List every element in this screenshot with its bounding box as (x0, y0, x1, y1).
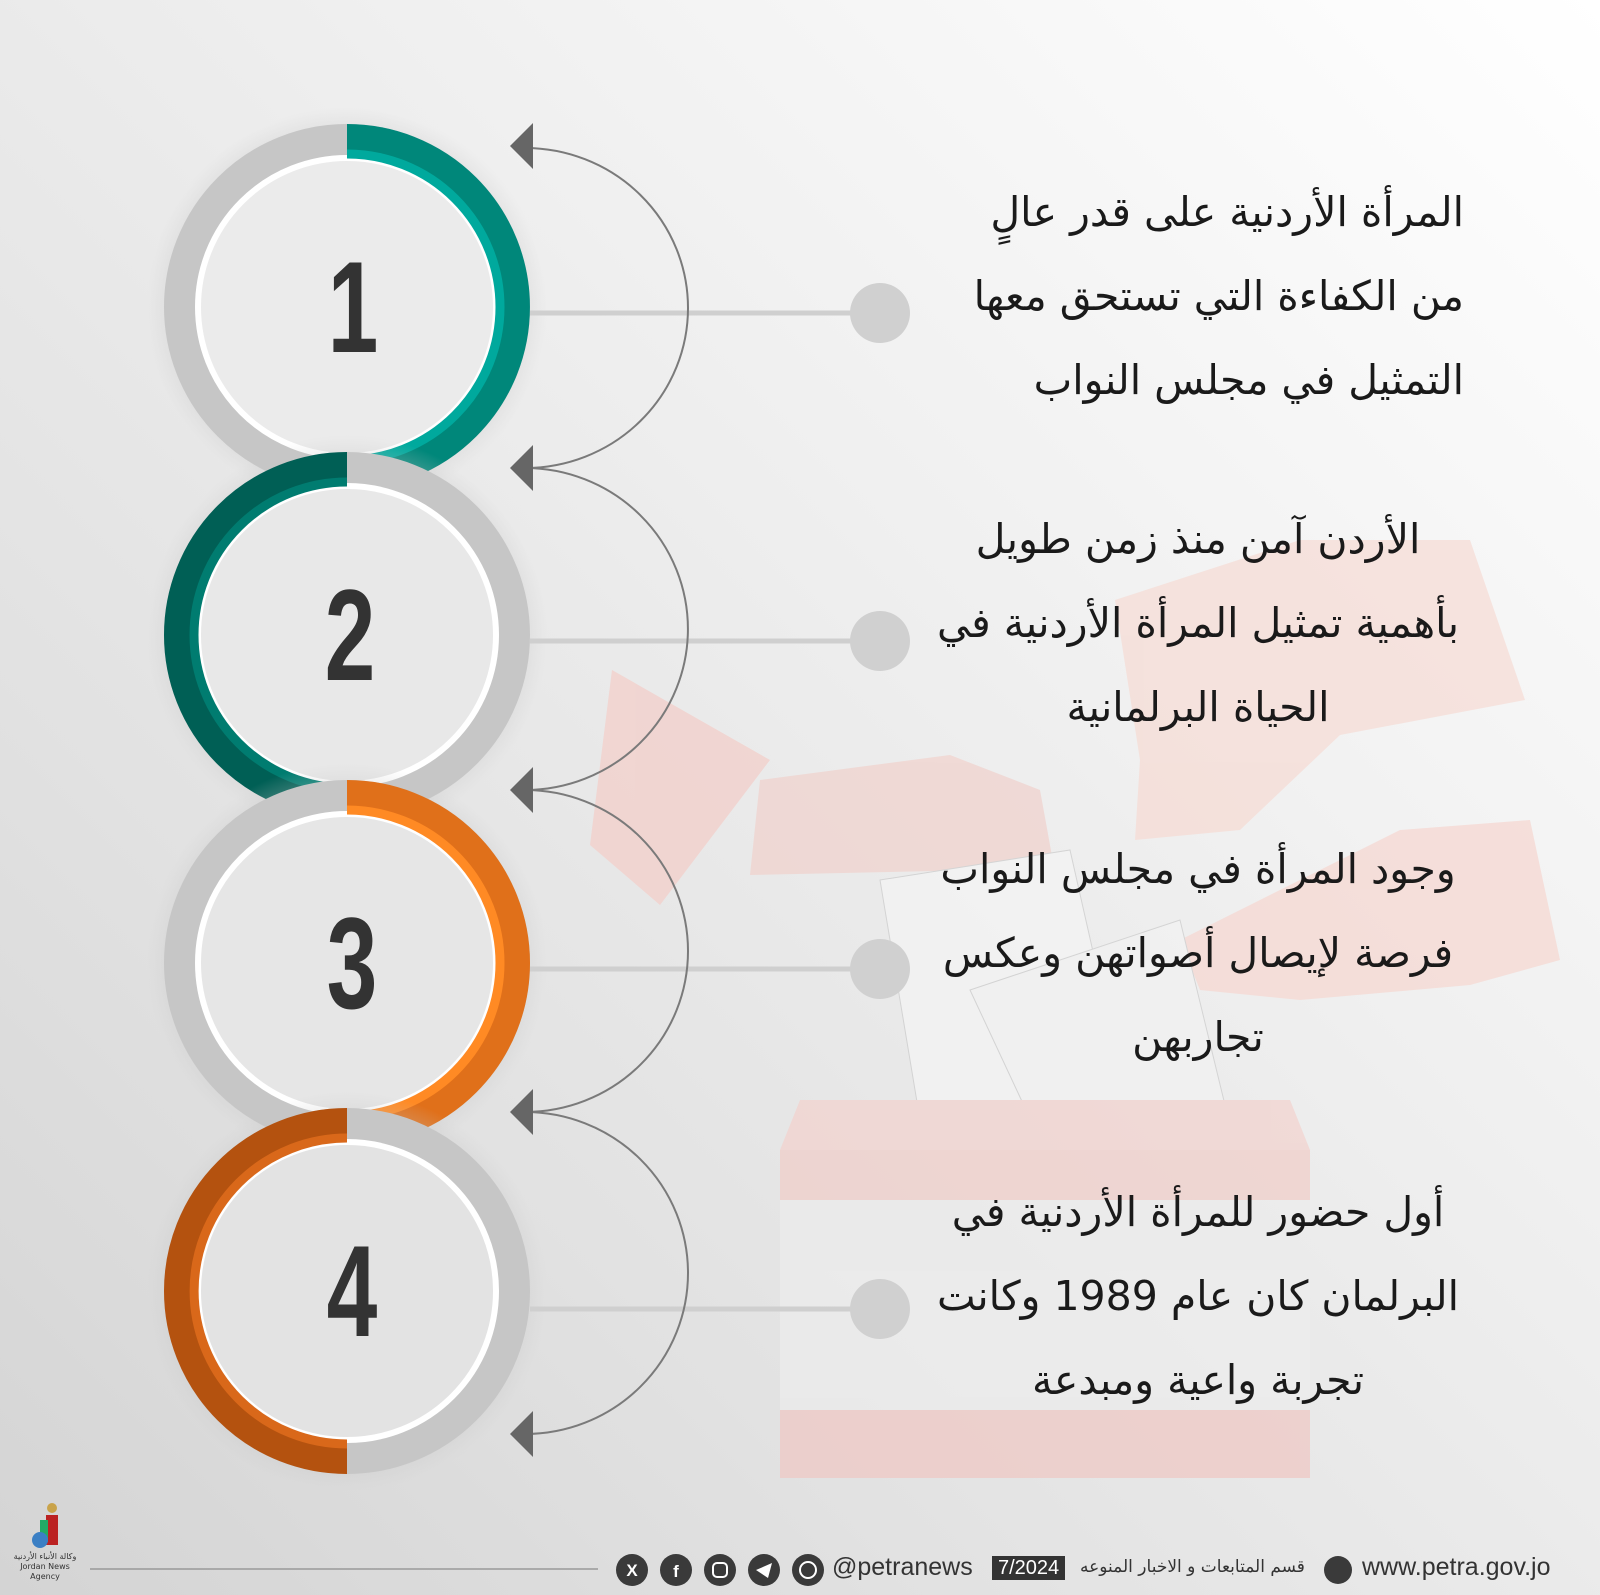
text 4: تجربة واعية ومبدعة (1032, 1356, 1364, 1404)
text 2: الأردن آمن منذ زمن طويل (976, 515, 1420, 563)
handle: @petranews (832, 1553, 973, 1581)
website: www.petra.gov.jo (1362, 1553, 1551, 1581)
text 4: أول حضور للمرأة الأردنية في (952, 1188, 1444, 1236)
text 1: المرأة الأردنية على قدر عالٍ (990, 188, 1464, 236)
logo text (14, 1551, 76, 1581)
text 2 (937, 514, 1459, 731)
circle 2: 2 (325, 562, 375, 708)
logo text: Jordan News Agency (20, 1562, 70, 1581)
footer (14, 1551, 1551, 1581)
circle 3: 3 (327, 890, 377, 1036)
circle 3 (147, 763, 547, 1163)
text 1: من الكفاءة التي تستحق معها (974, 272, 1464, 320)
text 3: تجاربهن (1132, 1013, 1264, 1061)
footer line (90, 1568, 598, 1570)
text 4 (937, 1185, 1459, 1404)
arrows arcs (525, 148, 688, 1434)
connectors with dots (530, 283, 910, 1339)
text 1 (974, 185, 1464, 404)
circle 1: 1 (328, 234, 378, 380)
text 2: الحياة البرلمانية (1066, 683, 1330, 731)
circle 4 (147, 1091, 547, 1491)
circle 4: 4 (327, 1218, 377, 1364)
circles column: X (626, 1561, 638, 1580)
date badge: 7/2024 (998, 1557, 1059, 1579)
text 2: بأهمية تمثيل المرأة الأردنية في (937, 599, 1459, 647)
text 3: وجود المرأة في مجلس النواب (940, 845, 1456, 893)
department: قسم المتابعات و الاخبار المنوعه (1080, 1557, 1305, 1577)
footer social icons (616, 1554, 1352, 1586)
logo (32, 1503, 58, 1548)
circle 1 (147, 107, 547, 507)
text 3: فرصة لإيصال أصواتهن وعكس (943, 929, 1453, 977)
text 3 (940, 842, 1456, 1061)
text 4: البرلمان كان عام 1989 وكانت (937, 1272, 1459, 1320)
text 1: التمثيل في مجلس النواب (1034, 356, 1464, 404)
circles column: f (673, 1562, 679, 1581)
circle 2 (147, 435, 547, 835)
logo text: وكالة الأنباء الأردنية (14, 1552, 76, 1561)
